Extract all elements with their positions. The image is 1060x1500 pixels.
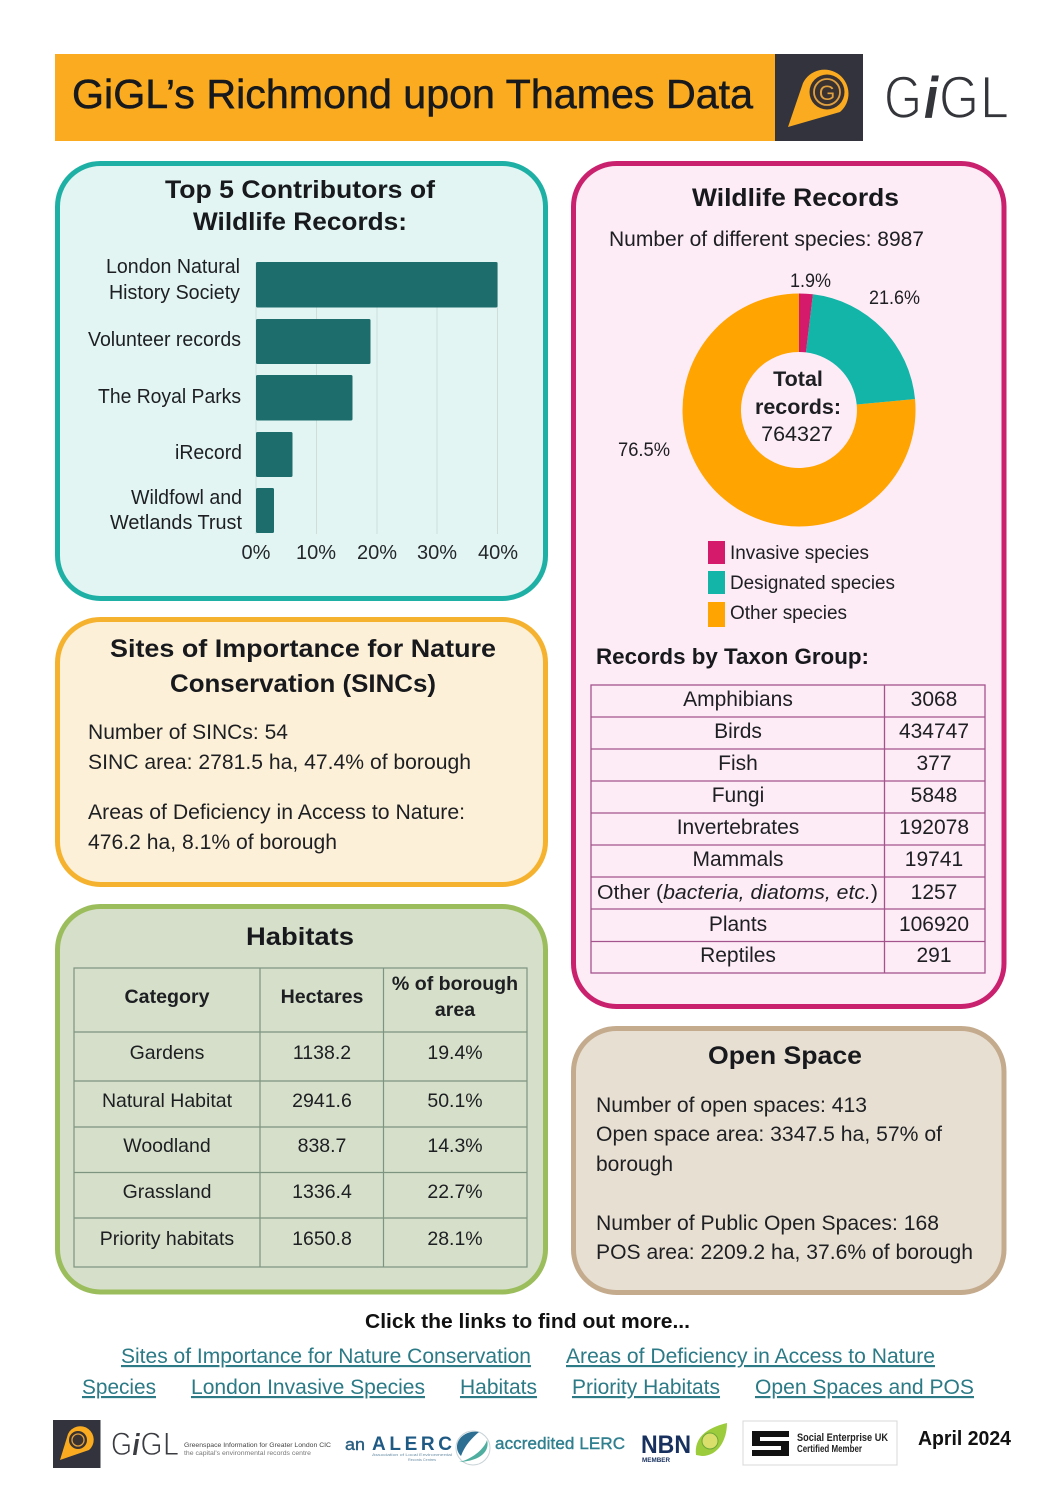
panel: wildlife records xyxy=(574,164,1004,1006)
donut chart: records by species type: 21.6% xyxy=(869,288,920,309)
table: habitats: 1650.8 xyxy=(292,1228,352,1250)
panel: habitats xyxy=(58,906,546,1292)
bar chart: contributors: 40% xyxy=(478,542,518,564)
header banner xyxy=(55,54,775,141)
table: habitats: 14.3% xyxy=(427,1135,483,1157)
table: taxon groups: Birds xyxy=(714,720,762,743)
table: habitats: 22.7% xyxy=(427,1181,483,1203)
panel: SINCs xyxy=(58,620,546,884)
table: taxon groups: 291 xyxy=(916,944,952,967)
bar chart: contributors: iRecord xyxy=(175,442,242,464)
icon: GiGL pin logo: G xyxy=(819,82,835,105)
donut chart: records by species type: records: xyxy=(755,395,841,419)
footer logo: ALERC accredited: an xyxy=(345,1435,365,1454)
panel: top 5 contributors xyxy=(58,164,546,598)
text: open space statistics: POS area: 2209.2 ha, 37.6% of borough xyxy=(596,1241,973,1264)
links: Habitats xyxy=(460,1375,537,1399)
footer logo: GiGL xyxy=(53,1420,332,1468)
text: open space statistics xyxy=(596,1094,973,1264)
text: number of species: Number of different species: 8987 xyxy=(609,228,924,251)
table: habitats xyxy=(74,968,527,1267)
table: taxon groups: 106920 xyxy=(899,913,969,936)
bar chart: contributors: Wetlands Trust xyxy=(110,512,242,534)
GiGL wordmark xyxy=(884,64,1009,131)
table: habitats: 2941.6 xyxy=(292,1090,352,1112)
panel: open space xyxy=(574,1028,1004,1292)
footer logo: GiGL: the capital's environmental records centre xyxy=(184,1451,312,1457)
table: taxon groups: Fungi xyxy=(712,784,764,807)
footer logo: NBN member: MEMBER xyxy=(642,1458,671,1464)
text: open space statistics: borough xyxy=(596,1153,673,1176)
table: habitats: Priority habitats xyxy=(100,1228,234,1250)
bar chart: contributors: History Society xyxy=(109,282,240,304)
legend: species type xyxy=(708,541,895,627)
bar chart: contributors: Wildfowl and xyxy=(131,487,242,509)
GiGL wordmark: G xyxy=(884,64,922,131)
bar chart: contributors: 10% xyxy=(296,542,336,564)
table: habitats: area xyxy=(435,999,476,1021)
text: SINC statistics: Areas of Deficiency in Access to Nature: xyxy=(88,801,465,824)
table: habitats: Natural Habitat xyxy=(102,1090,233,1112)
table: taxon groups xyxy=(591,685,985,973)
links: Species xyxy=(82,1375,156,1399)
table: taxon groups: 19741 xyxy=(905,848,963,871)
bar chart: contributors: 0% xyxy=(242,542,271,564)
links: Areas of Deficiency in Access to Nature xyxy=(566,1344,935,1368)
footer logo: ALERC accredited: Records Centres xyxy=(408,1457,436,1462)
table: taxon groups: Plants xyxy=(709,913,767,936)
links: London Invasive Species xyxy=(191,1375,425,1399)
donut chart: records by species type xyxy=(618,271,920,526)
table: habitats: Category xyxy=(125,986,210,1008)
text: SINC statistics: SINC area: 2781.5 ha, 47.4% of borough xyxy=(88,751,471,774)
heading: top 5 contributors xyxy=(165,176,436,236)
table: taxon groups: 5848 xyxy=(911,784,957,807)
GiGL wordmark: L xyxy=(980,64,1009,131)
table: habitats: 28.1% xyxy=(427,1228,483,1250)
donut chart: records by species type: 1.9% xyxy=(790,271,831,292)
heading: SINCs: Conservation (SINCs) xyxy=(170,670,436,698)
table: habitats: 838.7 xyxy=(298,1135,346,1157)
heading: top 5 contributors: Top 5 Contributors of xyxy=(165,176,436,204)
heading: open space: Open Space xyxy=(708,1042,862,1070)
bar chart: contributors: 30% xyxy=(417,542,457,564)
heading: wildlife records: Wildlife Records xyxy=(692,184,899,212)
text: SINC statistics: 476.2 ha, 8.1% of borough xyxy=(88,831,337,854)
footer logo: Social Enterprise UK: Certified Member xyxy=(797,1444,862,1455)
legend: species type: Designated species xyxy=(730,572,895,594)
footer logo: ALERC accredited: Association of Local Environmental xyxy=(372,1452,452,1457)
table: taxon groups: Amphibians xyxy=(683,688,793,711)
bar chart: contributors: The Royal Parks xyxy=(98,386,241,408)
table: taxon groups: Invertebrates xyxy=(677,816,799,839)
table: taxon groups: 1257 xyxy=(911,881,957,904)
GiGL wordmark: G xyxy=(939,64,979,131)
footer logo: Social Enterprise UK: Social Enterprise UK xyxy=(797,1432,888,1444)
links: Priority Habitats xyxy=(572,1375,720,1399)
footer logo: ALERC accredited: accredited LERC xyxy=(495,1434,625,1453)
table: habitats: 1336.4 xyxy=(292,1181,352,1203)
table: taxon groups: 434747 xyxy=(899,720,969,743)
footer logo: GiGL: G xyxy=(111,1426,132,1462)
table: habitats: % of borough xyxy=(392,973,518,995)
links xyxy=(82,1344,974,1399)
text: SINC statistics xyxy=(88,721,471,854)
heading: habitats: Habitats xyxy=(246,923,354,951)
table: taxon groups: Reptiles xyxy=(700,944,776,967)
table: habitats: 50.1% xyxy=(427,1090,483,1112)
table: habitats: Hectares xyxy=(281,986,363,1008)
footer logo: GiGL: i xyxy=(132,1427,141,1462)
footer logo: Social Enterprise UK xyxy=(743,1421,897,1465)
text: open space statistics: Number of Public Open Spaces: 168 xyxy=(596,1212,939,1235)
legend: species type: Other species xyxy=(730,602,847,624)
legend: species type: Invasive species xyxy=(730,542,869,564)
date: April 2024 xyxy=(918,1428,1012,1450)
table: taxon groups: 192078 xyxy=(899,816,969,839)
footer logo: NBN member: NBN xyxy=(641,1431,691,1459)
table: habitats: 19.4% xyxy=(427,1042,483,1064)
text: SINC statistics: Number of SINCs: 54 xyxy=(88,721,288,744)
donut chart: records by species type: 76.5% xyxy=(618,440,670,461)
table: habitats: Grassland xyxy=(123,1181,211,1203)
footer logo: NBN member xyxy=(641,1423,727,1464)
table: taxon groups: Fish xyxy=(718,752,758,775)
links: Sites of Importance for Nature Conservation xyxy=(121,1344,531,1368)
table: taxon groups: 3068 xyxy=(911,688,957,711)
table: habitats: Gardens xyxy=(130,1042,205,1064)
table: taxon groups: Mammals xyxy=(692,848,784,871)
donut chart: records by species type: Total xyxy=(773,367,823,391)
bar chart: contributors: 20% xyxy=(357,542,397,564)
table: habitats: 1138.2 xyxy=(293,1042,351,1064)
call to action: Click the links to find out more... xyxy=(365,1311,690,1333)
donut chart: records by species type: 764327 xyxy=(761,422,833,446)
heading: SINCs xyxy=(110,635,496,698)
icon: GiGL pin logo xyxy=(775,54,863,141)
bar chart: contributors: Volunteer records xyxy=(88,329,241,351)
bar chart: contributors: London Natural xyxy=(106,256,240,278)
GiGL wordmark: i xyxy=(924,66,940,131)
footer logo: ALERC accredited: ALERC xyxy=(372,1434,452,1455)
table: habitats: Woodland xyxy=(123,1135,211,1157)
footer logo: GiGL: L xyxy=(163,1426,179,1462)
text: open space statistics: Number of open spaces: 413 xyxy=(596,1094,867,1117)
table: taxon groups: Other (bacteria, diatoms, etc. ) xyxy=(597,882,878,904)
footer logo: ALERC accredited xyxy=(345,1431,625,1465)
bar chart: contributors xyxy=(88,256,518,564)
footer logo: GiGL: G xyxy=(140,1426,162,1462)
footer logo: GiGL: Greenspace Information for Greater London CIC xyxy=(184,1443,332,1449)
table: taxon groups: 377 xyxy=(916,752,952,775)
title: GiGL’s Richmond upon Thames Data xyxy=(72,71,753,117)
heading: records by taxon group: Records by Taxon Group: xyxy=(596,644,869,669)
heading: top 5 contributors: Wildlife Records: xyxy=(193,208,407,236)
links: Open Spaces and POS xyxy=(755,1375,974,1399)
text: open space statistics: Open space area: 3347.5 ha, 57% of xyxy=(596,1123,942,1146)
heading: SINCs: Sites of Importance for Nature xyxy=(110,635,496,663)
